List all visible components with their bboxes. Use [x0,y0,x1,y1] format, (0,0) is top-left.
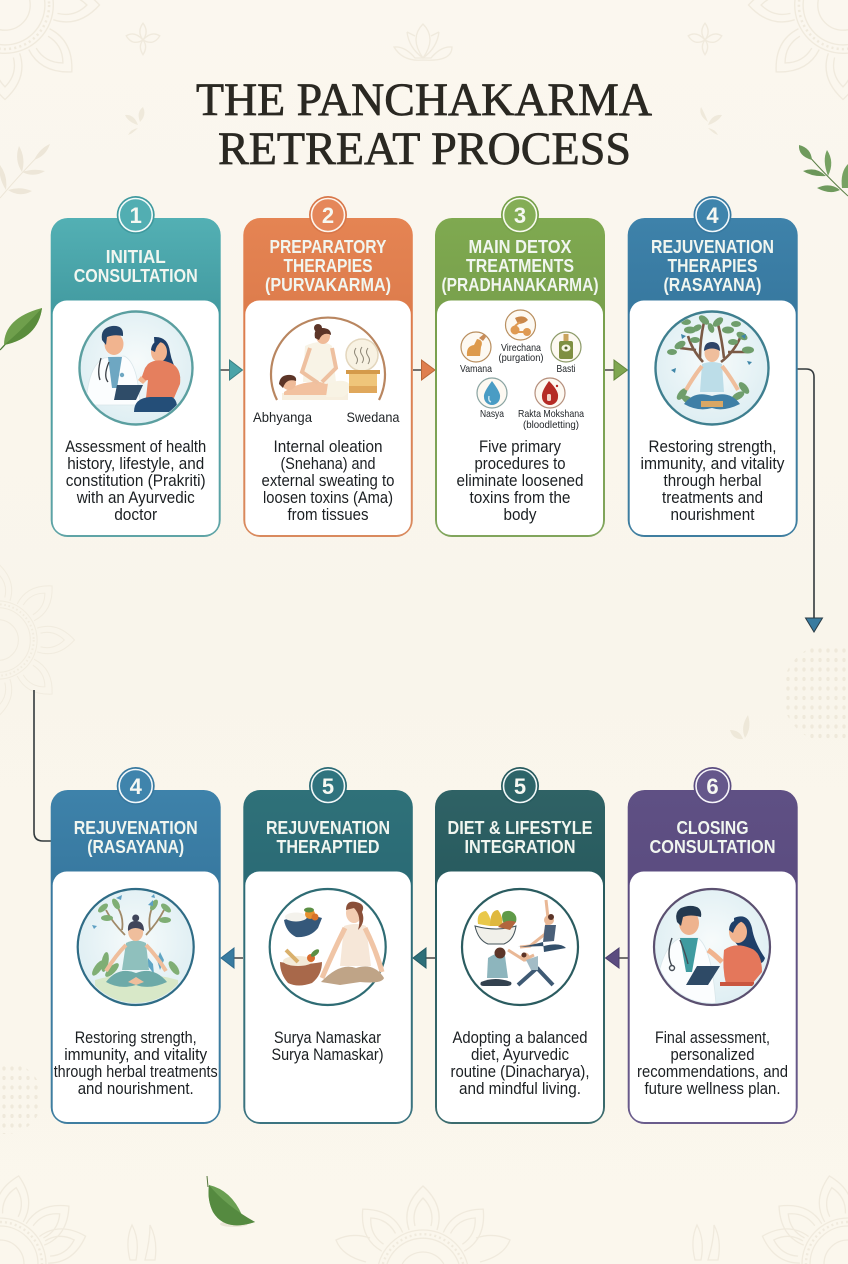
arrow: step 5 back to 4 [221,948,243,968]
panel: rejuvenation therapies [628,196,798,537]
description: through herbal [664,472,762,490]
detox procedure labels: Nasya [480,408,504,420]
description: with an Ayurvedic [76,489,195,507]
description: Surya Namaskar) [272,1046,384,1064]
description: external sweating to [262,472,394,490]
heading: (PRADHANAKARMA) [442,275,598,295]
detox procedure labels: Vamana [460,363,492,375]
description: routine (Dinacharya), [450,1063,590,1081]
heading: CONSULTATION [74,266,198,286]
detox procedure labels: Virechana [501,342,541,354]
icon: virechana [506,310,536,340]
arrow: step 6 back to 5 [413,948,435,968]
step badge 4: 4 [706,203,719,228]
description: Assessment of health [65,438,206,456]
description: diet, Ayurvedic [471,1046,569,1064]
description: Five primary [479,438,562,456]
step badge 6 [694,767,732,805]
arrow: step 2 to 3 [413,360,435,380]
description [640,438,785,524]
arrow: step 3 to 4 [605,360,628,380]
description: and nourishment. [78,1080,194,1098]
heading [442,237,598,295]
description: constitution (Prakriti) [66,472,206,490]
panel: main detox treatments [435,196,605,537]
panel: rejuvenation therapied [243,767,413,1124]
arrow: step 7 back to 6 [606,948,628,968]
description [450,1029,590,1098]
step badge 4: 4 [130,774,143,799]
description: Restoring strength, [648,438,776,456]
step badge 1 [117,196,155,234]
description: procedures to [474,455,566,473]
heading: TREATMENTS [466,256,574,276]
illustration labels [253,409,400,425]
heading: (RASAYANA) [87,837,184,857]
icon: vamana [461,332,491,362]
step badge 1: 1 [130,203,142,228]
illustration labels: Swedana [346,409,400,425]
description: treatments and [662,489,763,507]
description [637,1029,788,1098]
description: Adopting a balanced [452,1029,588,1047]
step badge 4 [694,196,732,234]
heading: CLOSING [676,818,748,838]
heading: (PURVAKARMA) [265,275,391,295]
description: future wellness plan. [644,1080,780,1098]
description: doctor [114,506,158,524]
illustration: abhyanga and swedana [271,318,385,400]
description: personalized [670,1046,754,1064]
description: Final assessment, [655,1029,770,1047]
panel: closing consultation [628,767,798,1124]
description [456,438,584,524]
description: (Snehana) and [280,455,376,473]
description: recommendations, and [637,1063,788,1081]
icon: rakta mokshana [535,378,565,408]
description: toxins from the [470,489,570,507]
description: immunity, and vitality [64,1046,208,1064]
icon: nasya [477,378,507,408]
step badge 5 [309,767,347,805]
description [262,438,394,524]
arrow: connector down [797,369,822,632]
description: and mindful living. [459,1080,581,1098]
illustration labels: Abhyanga [253,409,312,425]
heading: THERAPTIED [276,837,380,857]
description [272,1029,384,1064]
description [65,438,206,524]
illustration: doctor and patient review [654,889,770,1005]
description: body [504,506,537,524]
icon: green leaf left [0,308,42,350]
heading [74,818,198,857]
faint leaf sprig [0,144,50,198]
heading: DIET & LIFESTYLE [448,818,592,838]
description: loosen toxins (Ama) [263,489,393,507]
heading: THERAPIES [284,256,372,276]
description: eliminate loosened [456,472,584,490]
icon: basti [551,332,581,362]
description: from tissues [288,506,368,524]
illustration: meditation under tree [656,312,768,424]
heading: PREPARATORY [270,237,386,257]
panel: initial consultation [51,196,221,537]
icon: lotus ornament [394,24,452,60]
step badge 3 [501,196,539,234]
detox procedure labels: (purgation) [498,352,544,364]
illustration: meditation in garden [78,889,194,1005]
title: RETREAT PROCESS [218,123,631,175]
step badge 2 [309,196,347,234]
illustration: bowl and yoga poses [462,889,578,1005]
arrow: connector into row two [34,690,51,841]
detox procedure labels: Rakta Mokshana [518,408,584,420]
step badge 5: 5 [322,774,334,799]
description: through herbal treatments [54,1063,218,1081]
icon: green leaf bottom [207,1176,255,1227]
heading: REJUVENATION [74,818,198,838]
step badge 5 [501,767,539,805]
heading: REJUVENATION [266,818,390,838]
panel: preparatory therapies [243,196,413,537]
title [196,74,652,175]
icon: green leaf sprig top right [799,145,848,196]
heading [448,818,592,857]
step badge 5: 5 [514,774,526,799]
heading [651,237,774,295]
description [54,1029,218,1098]
detox procedure labels: Basti [556,363,576,375]
step badge 2: 2 [322,203,334,228]
heading: MAIN DETOX [468,237,572,257]
step badge 4 [117,767,155,805]
description: Internal oleation [274,438,382,456]
heading: THERAPIES [668,256,758,276]
panel: diet and lifestyle integration [435,767,605,1124]
description: history, lifestyle, and [67,455,204,473]
description: Surya Namaskar [274,1029,381,1047]
illustration: bowls and seated woman [270,889,386,1005]
step badge 6: 6 [706,774,719,799]
heading: INTEGRATION [464,837,576,857]
heading [265,237,391,295]
description: Restoring strength, [75,1029,197,1047]
heading [74,247,198,286]
arrow: step 1 to 2 [220,360,242,380]
detox procedure labels: (bloodletting) [523,419,579,431]
heading: INITIAL [106,247,166,267]
description: immunity, and vitality [640,455,785,473]
title: THE PANCHAKARMA [196,74,652,126]
heading: REJUVENATION [651,237,774,257]
heading: (RASAYANA) [664,275,762,295]
heading: CONSULTATION [650,837,776,857]
heading [266,818,390,857]
illustration: doctor and patient [80,312,192,424]
description: nourishment [670,506,755,524]
detox procedure labels [460,342,584,431]
step badge 3: 3 [514,203,526,228]
heading [650,818,776,857]
panel: rejuvenation rasayana [51,767,221,1124]
